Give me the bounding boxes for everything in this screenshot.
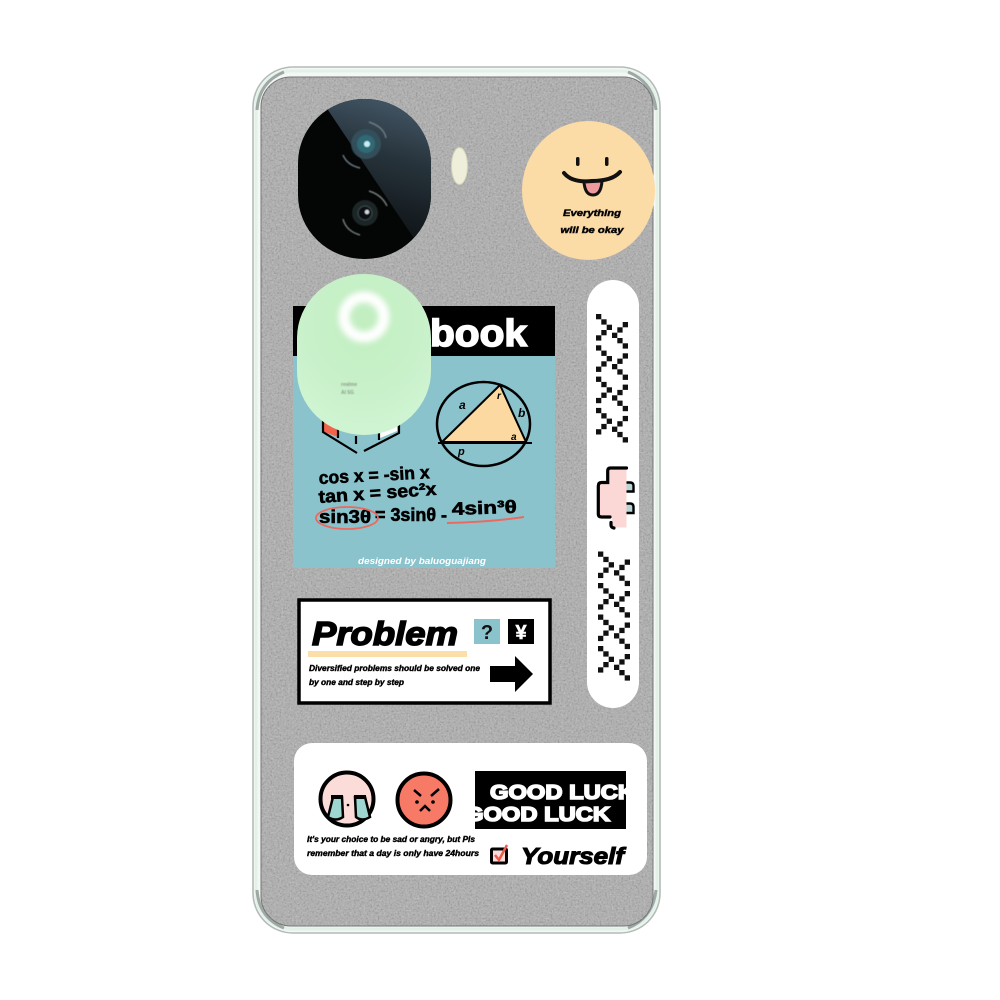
yellow underline bbox=[308, 651, 467, 657]
grey phone back bbox=[261, 77, 653, 926]
message text: remember that a day is only have 24hours bbox=[307, 849, 480, 858]
description: by one and step by step bbox=[309, 678, 404, 687]
geometry: hexagonal solid bbox=[322, 419, 399, 453]
checkbox icon bbox=[492, 845, 507, 863]
message text: It's your choice to be sad or angry, but Pls bbox=[307, 835, 476, 844]
geometry: triangle in circle: b bbox=[518, 406, 525, 420]
lower lens bbox=[343, 191, 387, 235]
description: Diversified problems should be solved one bbox=[309, 664, 481, 673]
smiley face bbox=[564, 157, 620, 195]
formulas: sin3θ bbox=[319, 507, 371, 527]
green ring light module bbox=[297, 274, 431, 435]
pink character icon bbox=[598, 468, 634, 528]
crying face bbox=[320, 772, 374, 826]
question icon: ? bbox=[481, 622, 493, 644]
angry face bbox=[398, 774, 450, 826]
sticker: smiley everything will be okay: Everything bbox=[563, 208, 621, 219]
credit line: designed by baluoguajiang bbox=[358, 556, 487, 566]
sticker: smiley everything will be okay: will be okay bbox=[560, 225, 624, 236]
arrow bbox=[490, 656, 533, 692]
formulas: 4sin³θ bbox=[451, 497, 517, 519]
good luck banner bbox=[475, 771, 626, 829]
formulas: cos x = -sin x bbox=[318, 462, 430, 488]
formulas: tan x = sec²x bbox=[318, 479, 437, 507]
lower pixel pattern bbox=[598, 552, 630, 681]
question icon bbox=[474, 619, 500, 644]
good luck banner: GOOD LUCK bbox=[465, 803, 610, 826]
formulas bbox=[316, 462, 524, 529]
geometry: triangle in circle bbox=[437, 382, 532, 466]
camera module bbox=[298, 99, 431, 259]
yen icon bbox=[508, 619, 534, 644]
message text bbox=[307, 835, 480, 858]
formulas: = 3sinθ - bbox=[375, 505, 447, 525]
upper pixel pattern bbox=[596, 314, 628, 442]
yen icon: ¥ bbox=[515, 622, 527, 644]
upper lens bbox=[343, 122, 386, 168]
geometry: triangle in circle: a bbox=[511, 432, 517, 443]
description bbox=[309, 664, 481, 687]
green ring light module: realme bbox=[341, 382, 357, 388]
good luck banner: GOOD LUCK bbox=[490, 781, 635, 804]
sticker: smiley everything will be okay bbox=[522, 121, 655, 260]
yourself: Yourself bbox=[521, 843, 626, 869]
geometry: triangle in circle: p bbox=[457, 446, 465, 458]
sticker: math book poster bbox=[293, 306, 555, 568]
problem heading: Problem bbox=[312, 615, 458, 652]
geometry: triangle in circle: r bbox=[497, 391, 502, 402]
sticker: good luck card bbox=[294, 743, 647, 875]
flash bbox=[452, 148, 468, 184]
geometry: triangle in circle: a bbox=[459, 398, 466, 412]
green ring light module: AI 5G bbox=[341, 390, 354, 396]
phone case frame bbox=[253, 67, 660, 933]
heading: book bbox=[430, 313, 528, 355]
sticker: pixel pill bbox=[587, 280, 639, 708]
sticker: problem sign bbox=[299, 600, 550, 703]
